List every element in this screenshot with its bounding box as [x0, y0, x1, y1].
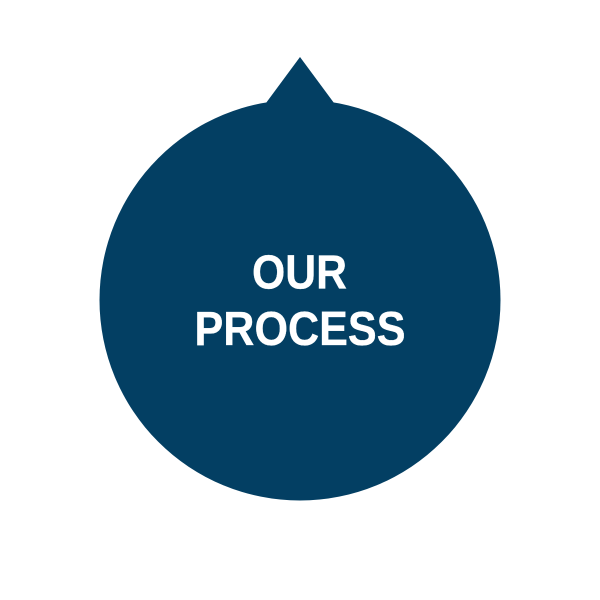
title line: PROCESS: PROCESS [194, 303, 406, 356]
circle with pointer [100, 57, 500, 500]
title [194, 246, 406, 356]
title line: OUR: OUR [252, 246, 347, 300]
